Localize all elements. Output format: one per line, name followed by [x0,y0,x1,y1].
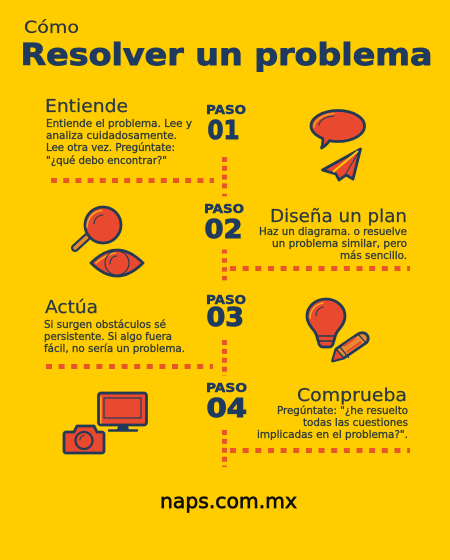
step 1 text: "¿qué debo encontrar?" [46,155,167,167]
step 3 text: Si surgen obstáculos sé [44,319,166,331]
step 1 text: analiza cuidadosamente. [46,130,177,142]
step 4 text: todas las cuestiones [303,417,408,429]
step 2 text: más sencillo. [340,250,407,262]
step 1 connector [51,157,227,195]
step 3 number [206,292,246,333]
footer url: naps.com.mx [160,489,297,513]
step 4 connector [224,430,410,467]
icon: paper plane [322,149,360,180]
step 1 text: Entiende el problema. Lee y [46,118,192,130]
step 1 text: Lee otra vez. Pregúntate: [46,142,175,154]
step 3 text: persistente. Si algo fuera [44,331,172,343]
step 1 number [206,102,246,146]
step 4 text: Comprueba [297,385,407,406]
title: Cómo [24,18,79,38]
step 1 text: Entiende [45,96,128,117]
step 2 text: un problema similar, pero [272,238,407,250]
step 4 number: PASO [206,380,247,395]
step 2 number: PASO [204,201,244,216]
title [20,18,432,73]
step 1 number: PASO [206,102,246,117]
step 2 connector [224,250,410,281]
icon: eye [91,250,143,276]
icon: speech bubble [311,110,364,148]
step 1 number: 01 [208,116,240,146]
step 3 text: fácil, no sería un problema. [44,343,185,355]
step 3 text [44,297,185,355]
step 3 text: Actúa [45,297,98,318]
step 4 number: 04 [206,394,247,424]
step 3 connector [46,340,224,376]
step 4 text: Pregúntate: "¿he resuelto [277,405,408,417]
step 2 text: Diseña un plan [270,206,407,227]
icon: monitor [98,393,146,430]
step 2 number: 02 [204,215,242,245]
step 4 text [257,385,408,441]
icon: magnifying glass [75,207,121,248]
icon: pencil [332,333,368,361]
step 4 text: implicadas en el problema?". [257,429,408,441]
step 2 text: Haz un diagrama. o resuelve [259,226,407,238]
step 1 text [45,96,192,167]
step 4 number [206,380,247,424]
icon: light bulb [307,299,345,347]
step 2 number [204,201,244,245]
step 3 number: 03 [206,303,244,333]
step 3 number: PASO [206,292,246,307]
title: Resolver un problema [20,38,432,73]
icon: camera [64,426,104,453]
step 2 text [259,206,407,262]
